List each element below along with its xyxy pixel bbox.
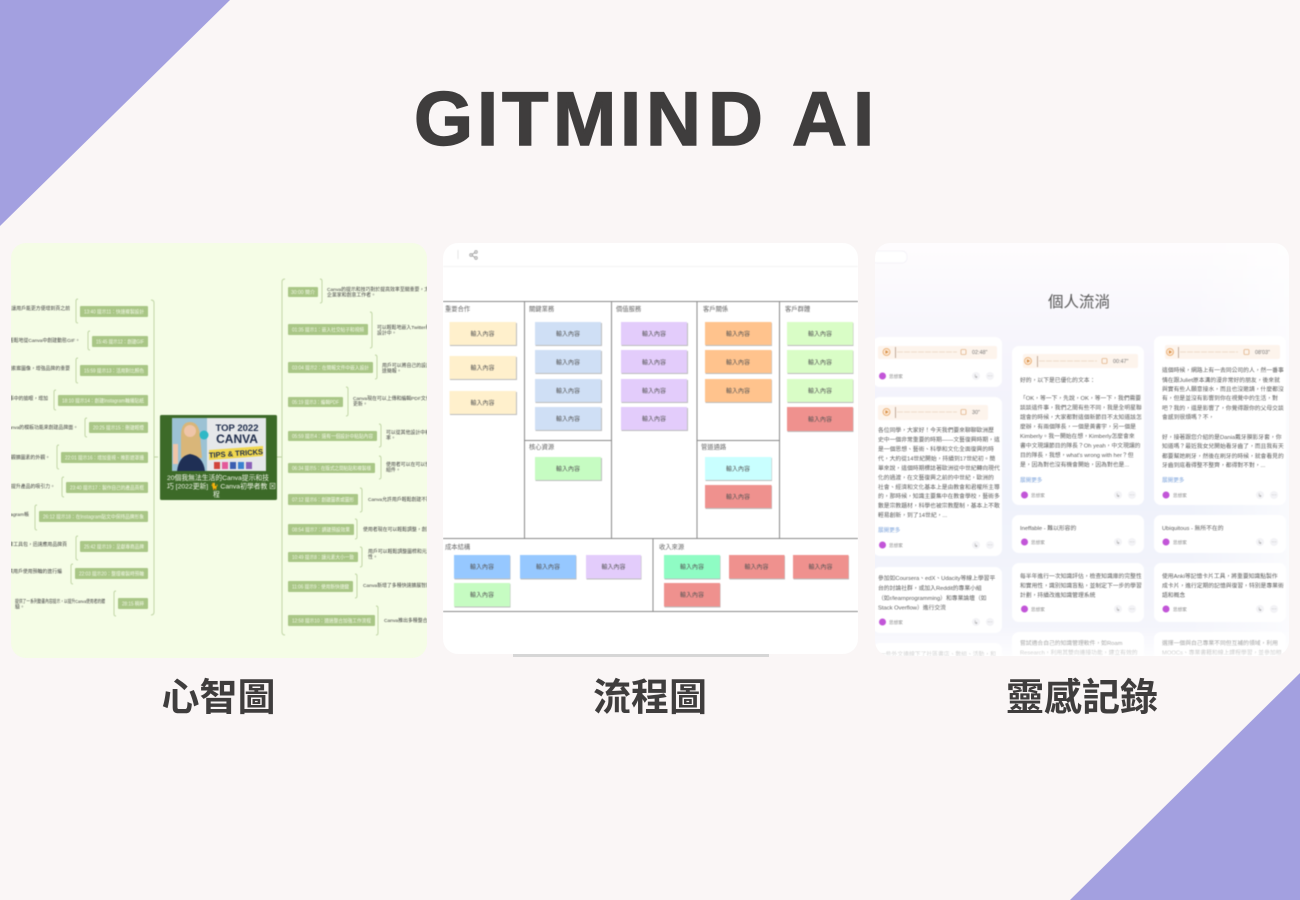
right branch nodes: 06:34 提示5：在版式之間粘貼和複製樣 bbox=[292, 464, 372, 472]
left branch descriptions: stagram帳 bbox=[6, 511, 29, 518]
thumbnail: CANVA bbox=[216, 432, 258, 446]
card: column 3 audio note: 會感到很煩嗎？不， bbox=[1162, 413, 1214, 421]
card: column 3 audio note: 有，但是並沒有影響到你在視覺中的生活，對 bbox=[1162, 394, 1278, 402]
card: column 2 faded bbox=[1020, 640, 1138, 656]
card: anki note: 使用Anki等記憶卡片工具，將重要知識點製作 bbox=[1162, 572, 1278, 580]
card: column 2 audio note: 目的隊長，我想，what's wrong with her？但 bbox=[1020, 451, 1134, 459]
card: column 1 audio: ↳ bbox=[974, 374, 978, 380]
column: customer relationships bbox=[703, 304, 772, 403]
card: column 1 long note: 是一個思想、藝術、科學和文化全面復興的時 bbox=[878, 445, 994, 453]
canvas grid bbox=[443, 302, 858, 612]
column: value propositions: 輸入內容 bbox=[642, 358, 666, 366]
card: column 2 audio note: ↳ bbox=[1116, 493, 1120, 499]
right branch nodes: 30:00 簡介 bbox=[291, 288, 316, 296]
column: key partners bbox=[445, 304, 517, 415]
card: column 3 audio note: 都要幫她刷牙，然後在刷牙的時候，就會看見的 bbox=[1162, 452, 1284, 460]
card: ineffable: Ineffable - 難以形容的 bbox=[1020, 524, 1076, 532]
right branch nodes: 07:12 提示6：創建圖表或圖形 bbox=[292, 496, 355, 504]
cell: cost structure: 成本結構 bbox=[445, 542, 471, 551]
left branch nodes: 23:40 提示17：製作自己的產品頁框 bbox=[70, 484, 144, 492]
right branch descriptions: 使用者現在可以輕鬆調整，創意設計非常 bbox=[363, 526, 451, 533]
card: column 2 audio note: 展開更多 bbox=[1020, 476, 1043, 484]
column: customer segments: 輸入內容 bbox=[808, 416, 832, 424]
card: anki note: ··· bbox=[1272, 606, 1277, 612]
flowchart scrollbar bbox=[513, 654, 769, 657]
column: value propositions: 輸入內容 bbox=[642, 330, 666, 338]
left branch descriptions: 驗。 bbox=[15, 604, 25, 610]
cell: cost structure: 輸入內容 bbox=[601, 563, 626, 571]
right branch nodes: 01:35 提示1：嵌入社交帖子和視頻 bbox=[292, 326, 365, 334]
card: column 2 audio note: 思想家 bbox=[1031, 492, 1045, 498]
column: value propositions bbox=[616, 304, 688, 431]
left branch nodes: 15:59 提示13：活用對比顏色 bbox=[84, 366, 144, 374]
thumbnail: TOP 2022 bbox=[216, 423, 258, 434]
right branch descriptions: 性。 bbox=[368, 554, 378, 560]
card: column 2 audio note: 誼會的時候，大家都對這個新節目不太知道該怎 bbox=[1020, 413, 1142, 421]
card: knowledge review: 和實用性，識別知識盲點，並制定下一步的學習 bbox=[1020, 582, 1142, 590]
card: column 3 audio note: 思想家 bbox=[1173, 492, 1187, 498]
left branch descriptions: 的品牌工具包，迅速應用品牌頁 bbox=[0, 541, 67, 548]
cell: channels: 輸入內容 bbox=[726, 493, 750, 501]
column: customer relationships: 輸入內容 bbox=[726, 358, 750, 366]
cell: channels bbox=[701, 442, 772, 509]
card: column 3 faded: 選擇一個與自己專業不同但互補的領域，利用 bbox=[1162, 639, 1278, 647]
card: column 2 audio note: ··· bbox=[1130, 492, 1135, 498]
card: column 1 long note: 化的過渡，在文藝復興之前的中世紀，歐洲的 bbox=[878, 474, 994, 482]
card: ubiquitous: ↳ bbox=[1258, 540, 1262, 546]
card: column 3 audio note: ↳ bbox=[1258, 493, 1262, 499]
column: customer relationships: 輸入內容 bbox=[726, 387, 750, 395]
column: key partners: 重要合作 bbox=[445, 304, 471, 313]
right branch descriptions: 企業家和創意工作者。 bbox=[327, 292, 376, 298]
card: column 1 long note: 思想家 bbox=[889, 542, 903, 548]
card: column 2 audio note: Kimberly。我一開始在想，Kimberly怎麼會來 bbox=[1020, 432, 1135, 440]
card: anki note: ↳ bbox=[1258, 607, 1262, 613]
right branch nodes: 05:19 提示3：編輯PDF bbox=[292, 398, 339, 406]
card: column 1 long note: ··· bbox=[988, 542, 993, 548]
cell: cost structure: 輸入內容 bbox=[470, 563, 494, 571]
card: ineffable: ··· bbox=[1130, 540, 1135, 546]
card: column 1 long note bbox=[873, 397, 1002, 556]
label: mind map: 心智圖 bbox=[161, 678, 276, 720]
card: ubiquitous: Ubiquitous - 無所不在的 bbox=[1162, 524, 1224, 532]
card: column 1 long note: 數是宗教題材，科學也被宗教壓制，基本上不敢 bbox=[878, 502, 1000, 510]
card: column 1 audio bbox=[873, 337, 1002, 387]
column: key activities bbox=[529, 304, 602, 431]
decorative triangle: top left bbox=[0, 0, 230, 226]
card: column 2 faded: Research，利用其雙向連接功能，建立有效的 bbox=[1020, 648, 1138, 656]
card: knowledge review: ··· bbox=[1130, 606, 1135, 612]
card: column 2 audio note: 書中文現讓節目的隊長？Oh yeah，中文現讓的 bbox=[1020, 442, 1141, 450]
card: column 1 learning note bbox=[873, 567, 1002, 633]
left branch nodes: 15:45 提示12：創建GIF bbox=[96, 338, 144, 346]
column: key partners: 輸入內容 bbox=[470, 330, 495, 338]
card: column 1 long note: 的，那時候，知識主要集中在教會學校，藝術多 bbox=[878, 492, 1000, 500]
card: anki note: 成卡片，進行定期的記憶與復習，特別是專業術 bbox=[1162, 582, 1284, 590]
card: column 1 long note: 社會、經濟和文化基本上是由教會和君權所主導 bbox=[878, 483, 1000, 491]
column: value propositions: 輸入內容 bbox=[642, 387, 666, 395]
column: key activities: 輸入內容 bbox=[556, 358, 580, 366]
column: customer segments: 客戶群體 bbox=[785, 304, 811, 313]
right branch descriptions: Canva推出多種整合服務 bbox=[384, 617, 437, 624]
right branch descriptions: 用戶可以將自己的設計素材 bbox=[382, 362, 441, 369]
central node: 巧 [2022更新] 🐈 Canva初學者教 ⊠ bbox=[167, 482, 276, 490]
card: knowledge review: 每半年進行一次知識評估，檢查知識庫的完整性 bbox=[1020, 572, 1142, 580]
card: knowledge review: 計劃，持續改進知識管理系統 bbox=[1020, 591, 1096, 599]
right branch nodes: 10:49 提示8：讓元素大小一致 bbox=[292, 553, 354, 561]
panel: inspiration notes bbox=[875, 252, 1286, 656]
column: customer segments: 輸入內容 bbox=[808, 358, 832, 366]
cell: channels: 管道通路 bbox=[701, 442, 727, 451]
card: column 1 audio: 02:48" bbox=[972, 350, 987, 356]
card: column 3 audio note bbox=[1154, 336, 1286, 505]
card: column 1 audio: 思想家 bbox=[889, 373, 903, 379]
right branch descriptions: Canva的提示和技巧對於提高效率至關重要，尤其是對於 bbox=[327, 286, 449, 293]
cell: revenue streams: 收入來源 bbox=[659, 542, 685, 551]
card: ubiquitous: ··· bbox=[1272, 540, 1277, 546]
right branch nodes: 08:54 提示7：調建預設效果 bbox=[292, 526, 350, 534]
panel: flowchart bbox=[437, 237, 864, 660]
panel: mind map bbox=[11, 243, 427, 658]
card: column 3 audio note: 情在跟Juliet原本溝的漫非常好的朋友，後來就 bbox=[1162, 376, 1280, 384]
cell: key resources: 核心資源 bbox=[529, 442, 555, 451]
card: ineffable: ↳ bbox=[1116, 540, 1120, 546]
right branch nodes: 11:06 提示9：使用新快捷鍵 bbox=[292, 582, 349, 590]
column: value propositions: 輸入內容 bbox=[642, 415, 666, 423]
left branch nodes: 22:01 提示16：增加壹視、推影遮罩邊 bbox=[65, 454, 145, 462]
left branch nodes: 28:15 精粹 bbox=[122, 600, 144, 608]
cell: revenue streams: 輸入內容 bbox=[808, 563, 833, 571]
right branch descriptions: 可以從其他設計中複製特 bbox=[386, 429, 440, 436]
column: value propositions: 價值服務 bbox=[616, 304, 642, 313]
cell: cost structure bbox=[445, 542, 642, 608]
right branch nodes: 05:59 提示4：還有一個設計中粘貼內容 bbox=[292, 432, 373, 440]
left branch nodes: 22:03 提示20：整理複製時預輪 bbox=[79, 570, 145, 578]
left branch nodes bbox=[39, 306, 148, 609]
card: column 1 learning note: 思想家 bbox=[889, 619, 903, 625]
card: column 3 faded bbox=[1162, 640, 1282, 656]
column: key partners: 輸入內容 bbox=[470, 364, 495, 372]
left branch descriptions: ng故事中的搶眼，增加 bbox=[0, 395, 48, 402]
column: customer segments: 輸入內容 bbox=[808, 387, 832, 395]
cell: key resources: 輸入內容 bbox=[556, 465, 580, 473]
card: column 2 audio note: 00:47" bbox=[1113, 359, 1128, 365]
card: column 2 audio note: 「OK，等一下，先說，OK，等一下，我們需要 bbox=[1020, 394, 1141, 402]
column: key activities: 關鍵業務 bbox=[529, 304, 555, 313]
right branch descriptions: 使用者可以在可以快速移 bbox=[386, 461, 440, 468]
card: column 3 faded: MOOCs、專業書籍和線上課程學習，並參加相 bbox=[1162, 648, 1282, 656]
card: column 3 audio note: 牙齒到底看得整不整齊，都得對不對，... bbox=[1162, 461, 1266, 469]
mind map connector brackets bbox=[35, 279, 381, 635]
card: column 1 long note: 史中一個非常重要的時期——文藝復興時期，這 bbox=[878, 436, 1000, 444]
card: column 3 audio note: ··· bbox=[1272, 492, 1277, 498]
column: customer relationships: 客戶關係 bbox=[703, 304, 728, 313]
card: column 1 long note: 輕易創新，到了14世紀，... bbox=[878, 511, 948, 519]
label: flowchart: 流程圖 bbox=[593, 678, 707, 720]
column: key activities: 輸入內容 bbox=[556, 330, 580, 338]
left branch descriptions: 提供了一系列動畫內容提示，以提升Canva使用者的體 bbox=[15, 598, 105, 605]
card: column 3 audio note: 與實有些人願意接水，而且也沒邀請，什麼都沒 bbox=[1162, 385, 1284, 393]
card: column 1 audio: ··· bbox=[988, 374, 993, 380]
card: column 2 audio note: 麼辦，有兩個隊長，一個是黃書宇，另一個是 bbox=[1020, 422, 1136, 430]
cell: cost structure: 輸入內容 bbox=[470, 591, 494, 599]
card: column 3 audio note: 展開更多 bbox=[1162, 476, 1185, 484]
bottom fade overlay bbox=[881, 640, 1282, 656]
left branch nodes: 25:42 提示19：呈獻專商品牌 bbox=[84, 542, 144, 550]
card: column 1 long note: 單來說，這個時期標誌著歐洲從中世紀轉向現代 bbox=[878, 464, 1000, 472]
column: key activities: 輸入內容 bbox=[556, 387, 580, 395]
central node bbox=[160, 415, 277, 500]
left branch descriptions: 輕出供用戶使用預輪的進行編 bbox=[0, 568, 62, 575]
right branch descriptions: 設計中。 bbox=[377, 330, 397, 336]
right branch descriptions: Canva允許用戶輕鬆創建不同類型的 bbox=[368, 496, 446, 503]
right branch nodes: 12:58 提示10：適過整合加強工作流程 bbox=[292, 616, 371, 624]
cell: revenue streams bbox=[659, 542, 849, 608]
card: ineffable bbox=[1012, 515, 1144, 553]
card: column 2 faded: 嘗試適合自己的知識管理軟件，如Roam bbox=[1020, 639, 1123, 647]
right branch descriptions: 組件。 bbox=[386, 466, 401, 474]
right branch descriptions: Canva新增了多種快速擴展智能設計 bbox=[363, 582, 441, 589]
right branch descriptions: 達簡報。 bbox=[382, 368, 402, 374]
card: column 1 learning note: ↳ bbox=[974, 620, 978, 626]
card: column 1 learning note: 台的討論社群，或加入Reddit的專業小組 bbox=[878, 584, 982, 592]
card: column 2 audio note: 好的，以下是已優化的文本： bbox=[1020, 376, 1095, 384]
right branch descriptions: 更新。 bbox=[353, 400, 368, 408]
right branch nodes: 03:04 提示2：在簡報文件中嵌入設計 bbox=[292, 364, 369, 372]
cell: key resources bbox=[529, 442, 602, 481]
left branch nodes: 13:40 提示11：快速複製設計 bbox=[84, 308, 144, 316]
right branch descriptions: 率。 bbox=[386, 434, 396, 442]
card: column 1 faded: 一些外文連線下了社區書店、數組、活動，和 bbox=[880, 650, 996, 658]
card: column 2 audio note: 談談這件事，我們之間有些不同，我是全明星聯 bbox=[1020, 404, 1142, 412]
card: column 2 audio note: 是，因為對也沒有機會開始，因為對也是... bbox=[1020, 460, 1130, 468]
card: knowledge review bbox=[1012, 563, 1144, 622]
search pill bbox=[872, 251, 907, 263]
column: customer relationships: 輸入內容 bbox=[726, 330, 750, 338]
card: anki note: 語和概念 bbox=[1162, 591, 1185, 599]
card: anki note: 思想家 bbox=[1173, 606, 1187, 612]
card: column 1 long note: 30" bbox=[972, 410, 980, 416]
card: knowledge review: 思想家 bbox=[1031, 606, 1045, 612]
right branch descriptions: Canva現在可以上傳和編輯PDF文件，這使得 bbox=[353, 395, 450, 402]
card: anki note bbox=[1154, 563, 1286, 622]
cell: revenue streams: 輸入內容 bbox=[680, 563, 704, 571]
card: knowledge review: ↳ bbox=[1116, 607, 1120, 613]
thumbnail bbox=[172, 418, 266, 471]
panel heading: 個人流淌 bbox=[1048, 293, 1110, 311]
decorative triangle: bottom right bbox=[1070, 673, 1300, 900]
card: column 1 learning note: 參加如Coursera、edX、Udacity等線上學習平 bbox=[878, 574, 995, 582]
card: column 2 audio note bbox=[1012, 346, 1144, 505]
card: column 1 learning note: （如r/learnprogramming）和專業論壇（如 bbox=[878, 594, 987, 602]
central node: 程 bbox=[213, 490, 220, 498]
right branch descriptions: 可以輕鬆地嵌入Twitter和YouTube bbox=[377, 324, 450, 331]
right branch descriptions bbox=[326, 286, 427, 624]
card: column 3 audio note: 這個時候，網路上有一去同公司的人，然一番事 bbox=[1162, 366, 1284, 374]
central node: 20個我無法生活的Canva提示和技 bbox=[167, 473, 269, 482]
right branch descriptions: 用戶可以輕鬆調整圖標和元素的大小 bbox=[368, 548, 446, 555]
column: key activities: 輸入內容 bbox=[556, 415, 580, 423]
card: ubiquitous: 思想家 bbox=[1173, 539, 1187, 545]
card: column 1 long note: 代，大約從14世紀開始，持續到17世紀初。簡 bbox=[878, 454, 995, 462]
column: key partners: 輸入內容 bbox=[470, 399, 495, 407]
card: column 3 audio note: 吧？我的，還是影響了，你覺得跟你的父母交談 bbox=[1162, 404, 1284, 412]
cell: cost structure: 輸入內容 bbox=[536, 563, 560, 571]
left branch descriptions bbox=[11, 304, 106, 610]
left branch nodes: 26:12 提示18：在Instagram貼文中保持品牌形象 bbox=[43, 512, 144, 520]
card: column 3 audio note: 08'03" bbox=[1255, 350, 1270, 356]
cell: revenue streams: 輸入內容 bbox=[744, 563, 769, 571]
toolbar bbox=[457, 250, 478, 260]
card: column 3 audio note: 好，接著跟您介紹的是Dania戴牙膜影牙套，你 bbox=[1162, 433, 1282, 441]
label: inspiration notes: 靈感記錄 bbox=[1006, 678, 1158, 720]
card: column 1 learning note: Stack Overflow）進行交流 bbox=[878, 604, 946, 612]
right branch nodes bbox=[288, 287, 377, 626]
cell: revenue streams: 輸入內容 bbox=[680, 591, 704, 599]
card: column 1 long note: 展開更多 bbox=[878, 526, 901, 534]
card: column 3 audio note: 知道嗎？最近我女兒開始看牙齒了，而且我有天 bbox=[1162, 442, 1284, 450]
left branch nodes: 20:25 提示15：刪建輕煙 bbox=[93, 424, 144, 432]
column: customer segments: 輸入內容 bbox=[808, 330, 832, 338]
thumbnail: TIPS & TRICKS bbox=[209, 447, 263, 460]
card: column 1 faded bbox=[882, 650, 996, 656]
cell: channels: 輸入內容 bbox=[726, 465, 750, 473]
column: customer segments bbox=[785, 304, 854, 432]
left branch nodes: 18:10 提示14：創建Instagram輪播貼紙 bbox=[62, 396, 145, 404]
card: column 1 long note: ↳ bbox=[974, 543, 978, 549]
card: ubiquitous bbox=[1154, 515, 1286, 553]
title: GITMIND AI bbox=[414, 77, 874, 162]
card: column 1 long note: 各位同學，大家好！今天我們要來聊聊歐洲歷 bbox=[878, 426, 994, 434]
icon: share bbox=[470, 251, 477, 259]
card: ineffable: 思想家 bbox=[1031, 539, 1045, 545]
card: column 1 learning note: ··· bbox=[988, 620, 993, 626]
